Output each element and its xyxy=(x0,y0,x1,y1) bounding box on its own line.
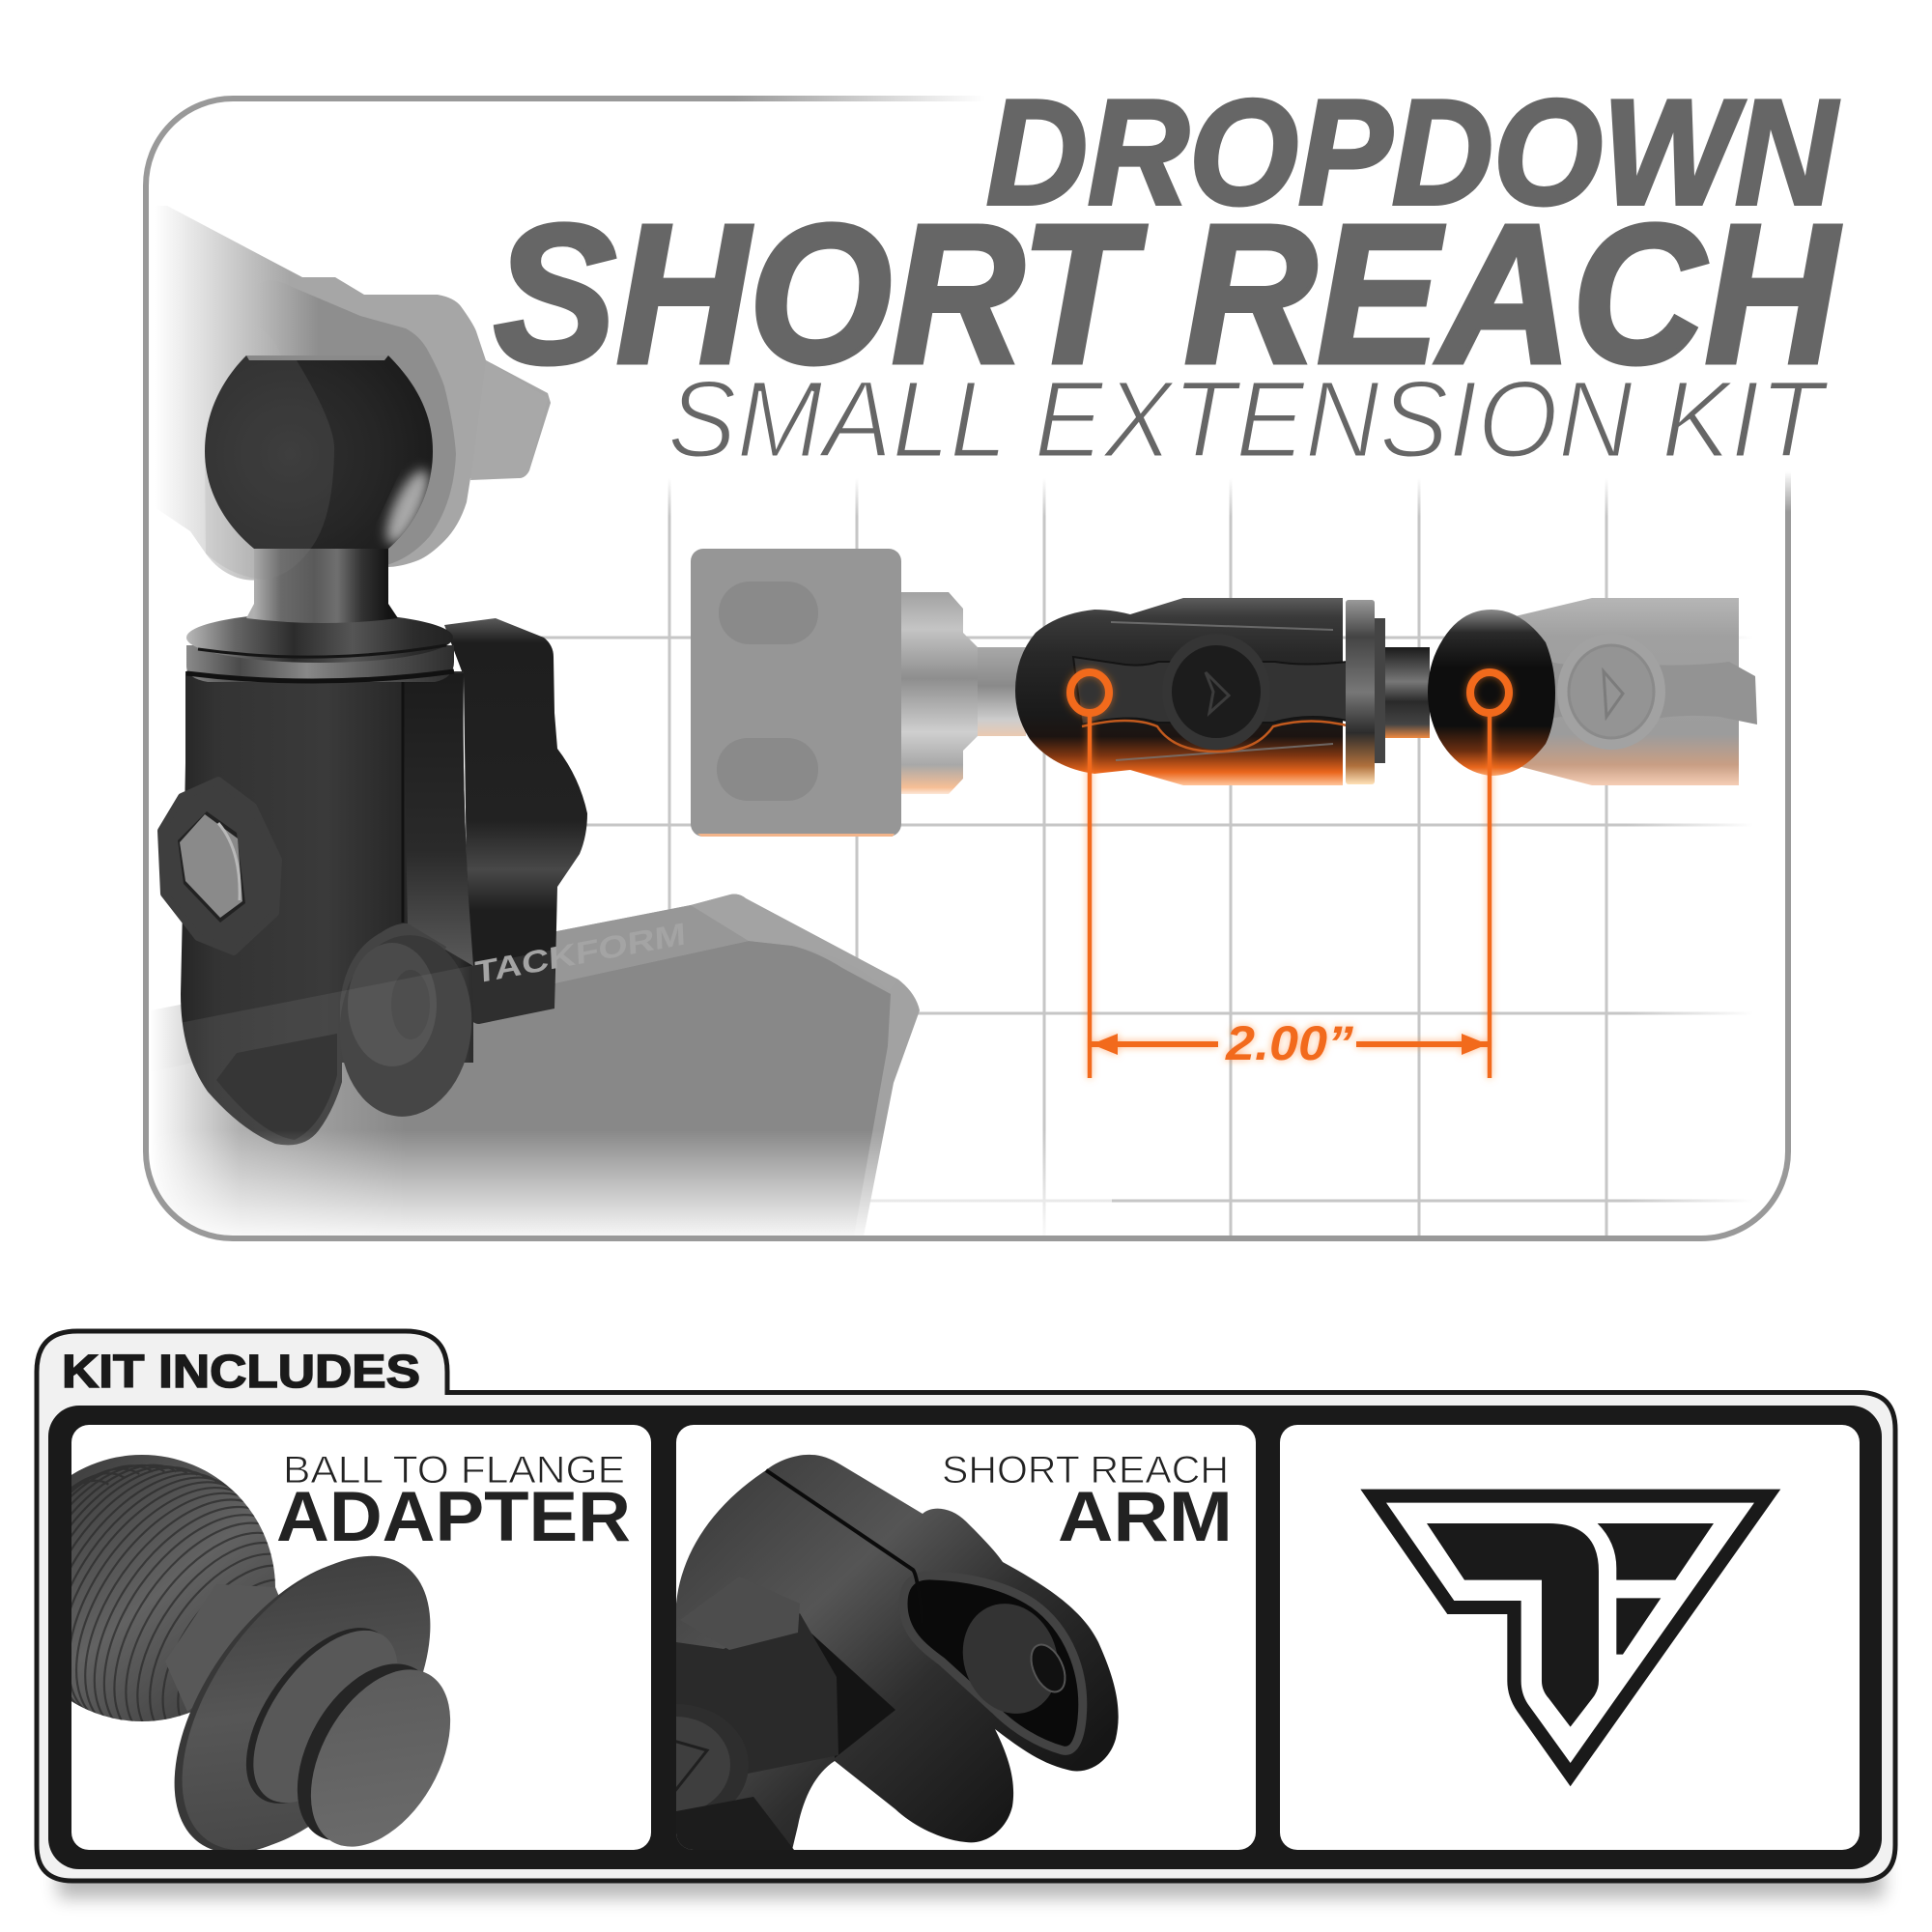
ghosted base block xyxy=(691,549,1026,837)
ghosted clamp behind ball xyxy=(152,206,551,581)
card label: ball to flange: BALL TO FLANGE xyxy=(283,1449,625,1492)
big mount: collar plate xyxy=(186,612,454,682)
icon: flange xyxy=(174,1555,450,1850)
big mount: clamp body xyxy=(181,671,479,1145)
washer and stem xyxy=(1346,600,1430,784)
kit includes shadow xyxy=(58,1860,1884,1898)
card label: short reach: SHORT REACH xyxy=(942,1449,1229,1492)
main arm xyxy=(1015,598,1362,785)
big mount: neck xyxy=(246,546,398,623)
icon: ribbed ball xyxy=(71,1455,275,1721)
dimension: 2.00 inch: 2.00” xyxy=(1225,1016,1353,1070)
subtitle: SMALL EXTENSION KIT xyxy=(668,358,1830,480)
card: short reach arm xyxy=(676,1425,1256,1850)
card: ball to flange adapter xyxy=(71,1425,651,1850)
icon: arm body xyxy=(676,1455,1119,1850)
icon: triangular TF logo xyxy=(1360,1490,1780,1786)
bottom fade xyxy=(165,1135,1112,1236)
title line: Dropdown: DROPDOWN xyxy=(986,69,1839,236)
card label: arm: ARM xyxy=(1058,1478,1233,1556)
big mount: ball xyxy=(205,355,437,580)
title line: Short Reach: SHORT REACH xyxy=(494,184,1841,405)
icon: wing knob xyxy=(676,1613,838,1850)
title xyxy=(494,69,1841,480)
device brand text: TACKFORM xyxy=(474,916,687,990)
ghosted device below mount xyxy=(151,895,920,1241)
big mount: wing knob xyxy=(444,618,587,1024)
panel: dimension diagram xyxy=(145,87,1816,1241)
card label: adapter: ADAPTER xyxy=(276,1478,631,1556)
panel: kit includes xyxy=(0,1331,1895,1896)
ghosted right arm xyxy=(1507,598,1757,785)
dimension: 2.00 inch xyxy=(1070,672,1509,1078)
icon: adapter neck xyxy=(168,1584,278,1712)
heading: kit includes: KIT INCLUDES xyxy=(62,1346,420,1398)
big mount: hex bolt xyxy=(161,781,278,952)
measurement grid xyxy=(483,478,1753,1241)
card: logo xyxy=(1280,1425,1860,1850)
ball end xyxy=(1428,610,1555,776)
device overlay on mount xyxy=(183,951,554,1145)
